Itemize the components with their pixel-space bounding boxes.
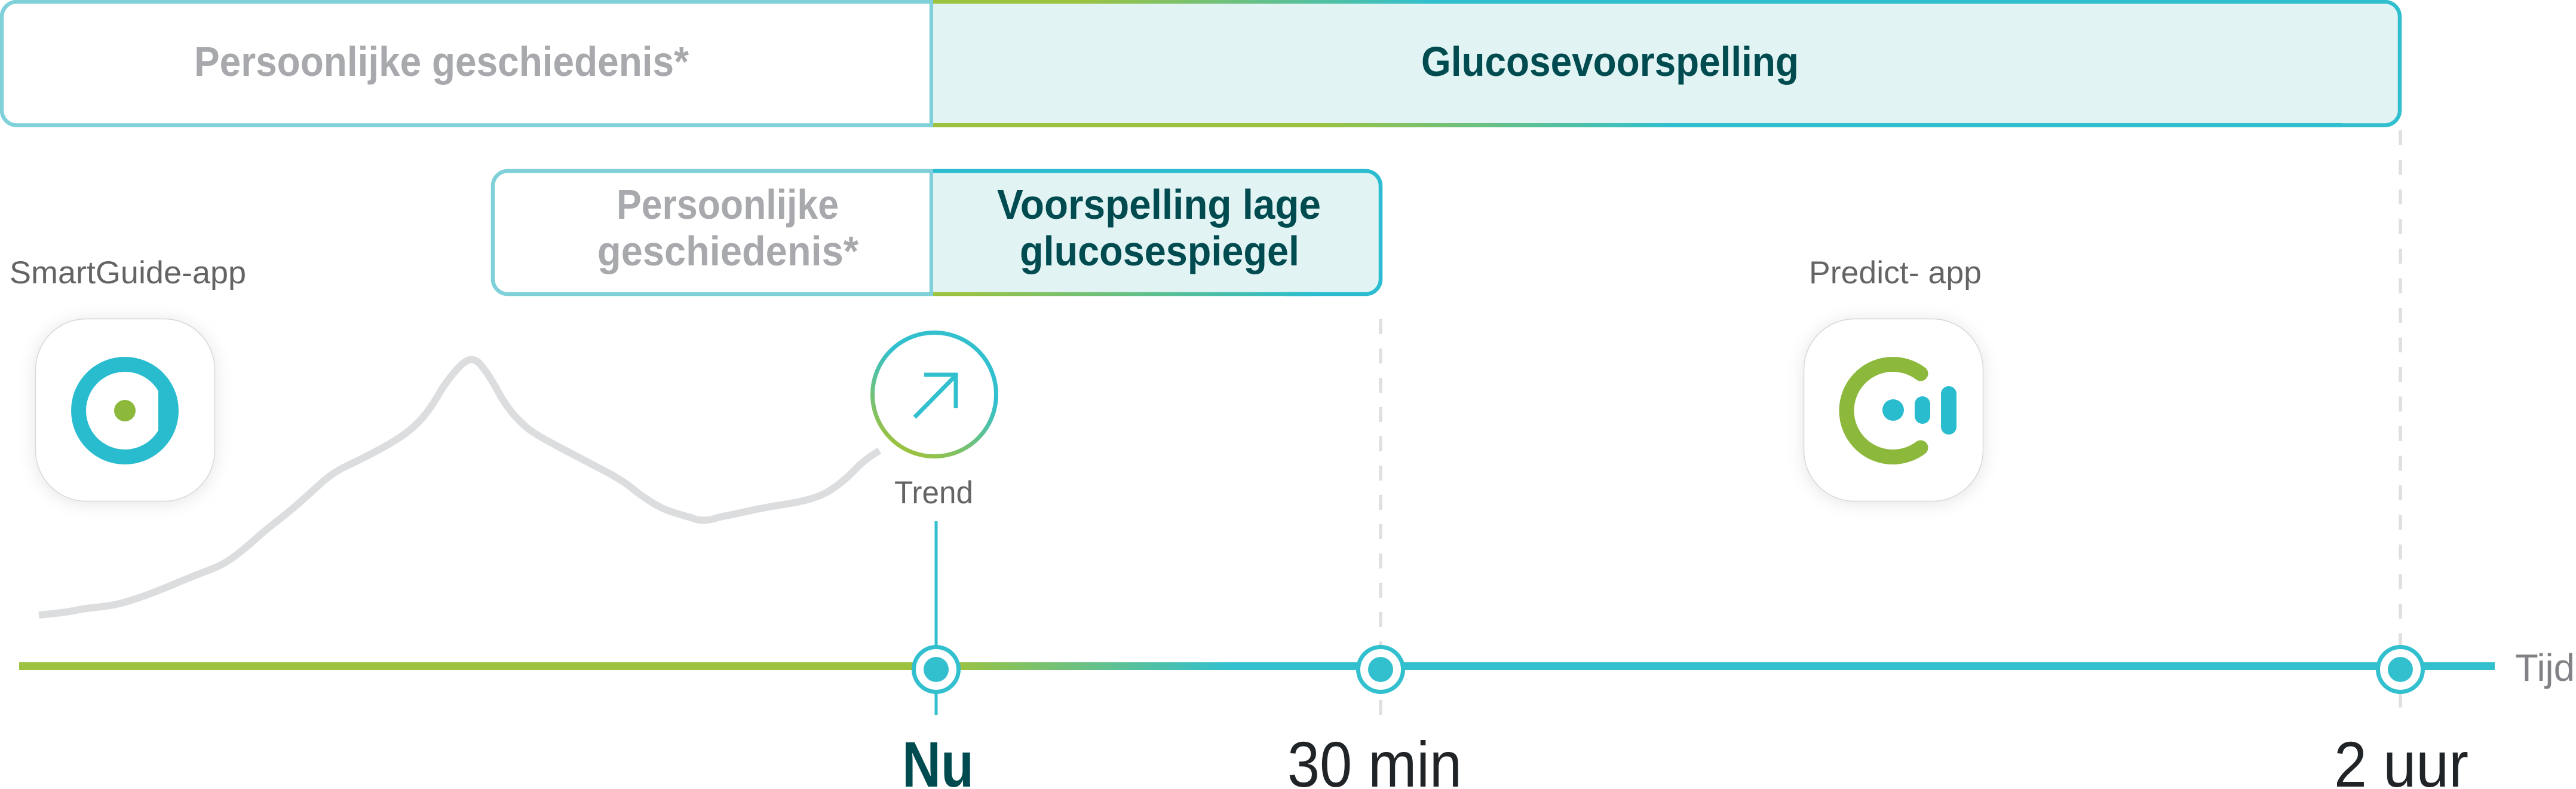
panel: second box personal history (493, 171, 931, 294)
label: Predict-app: Predict- app (1809, 255, 1982, 290)
text: Persoonlijke geschiedenis two lines (597, 181, 859, 274)
dashed guide: 30 min (1379, 319, 1382, 715)
chart: glucose history curve (39, 360, 879, 615)
text: Voorspelling lage glucosespiegel (997, 181, 1321, 274)
panel: top bar personal history (2, 2, 931, 126)
connector: now marker line (934, 521, 938, 715)
panel: top bar glucose prediction (931, 0, 2400, 127)
label: SmartGuide-app: SmartGuide-app (10, 255, 246, 290)
marker: 30 min (1358, 647, 1403, 692)
text: Voorspelling lage glucosespiegel: Voorspelling lage (997, 181, 1321, 228)
heading: Glucosevoorspelling: Glucosevoorspelling (1421, 38, 1799, 85)
text: Persoonlijke geschiedenis two lines: Persoonlijke (617, 181, 839, 228)
icon: trend arrow in circle (872, 332, 996, 457)
marker: Nu (914, 647, 958, 692)
axis label: Tijd: Tijd (2515, 646, 2575, 689)
heading: Persoonlijke geschiedenis: Persoonlijke geschiedenis* (194, 38, 689, 85)
label: Trend: Trend (894, 475, 973, 510)
timeline axis (19, 662, 2495, 670)
marker: 2 uur (2378, 647, 2423, 692)
text: Voorspelling lage glucosespiegel: glucosespiegel (1020, 228, 1299, 274)
text: Persoonlijke geschiedenis two lines: geschiedenis* (597, 228, 859, 274)
icon: Predict app (1804, 319, 1983, 501)
dashed guide: 2 uur (2399, 130, 2402, 715)
icon: SmartGuide app (36, 319, 215, 501)
panel: second box low glucose prediction (931, 169, 1381, 296)
